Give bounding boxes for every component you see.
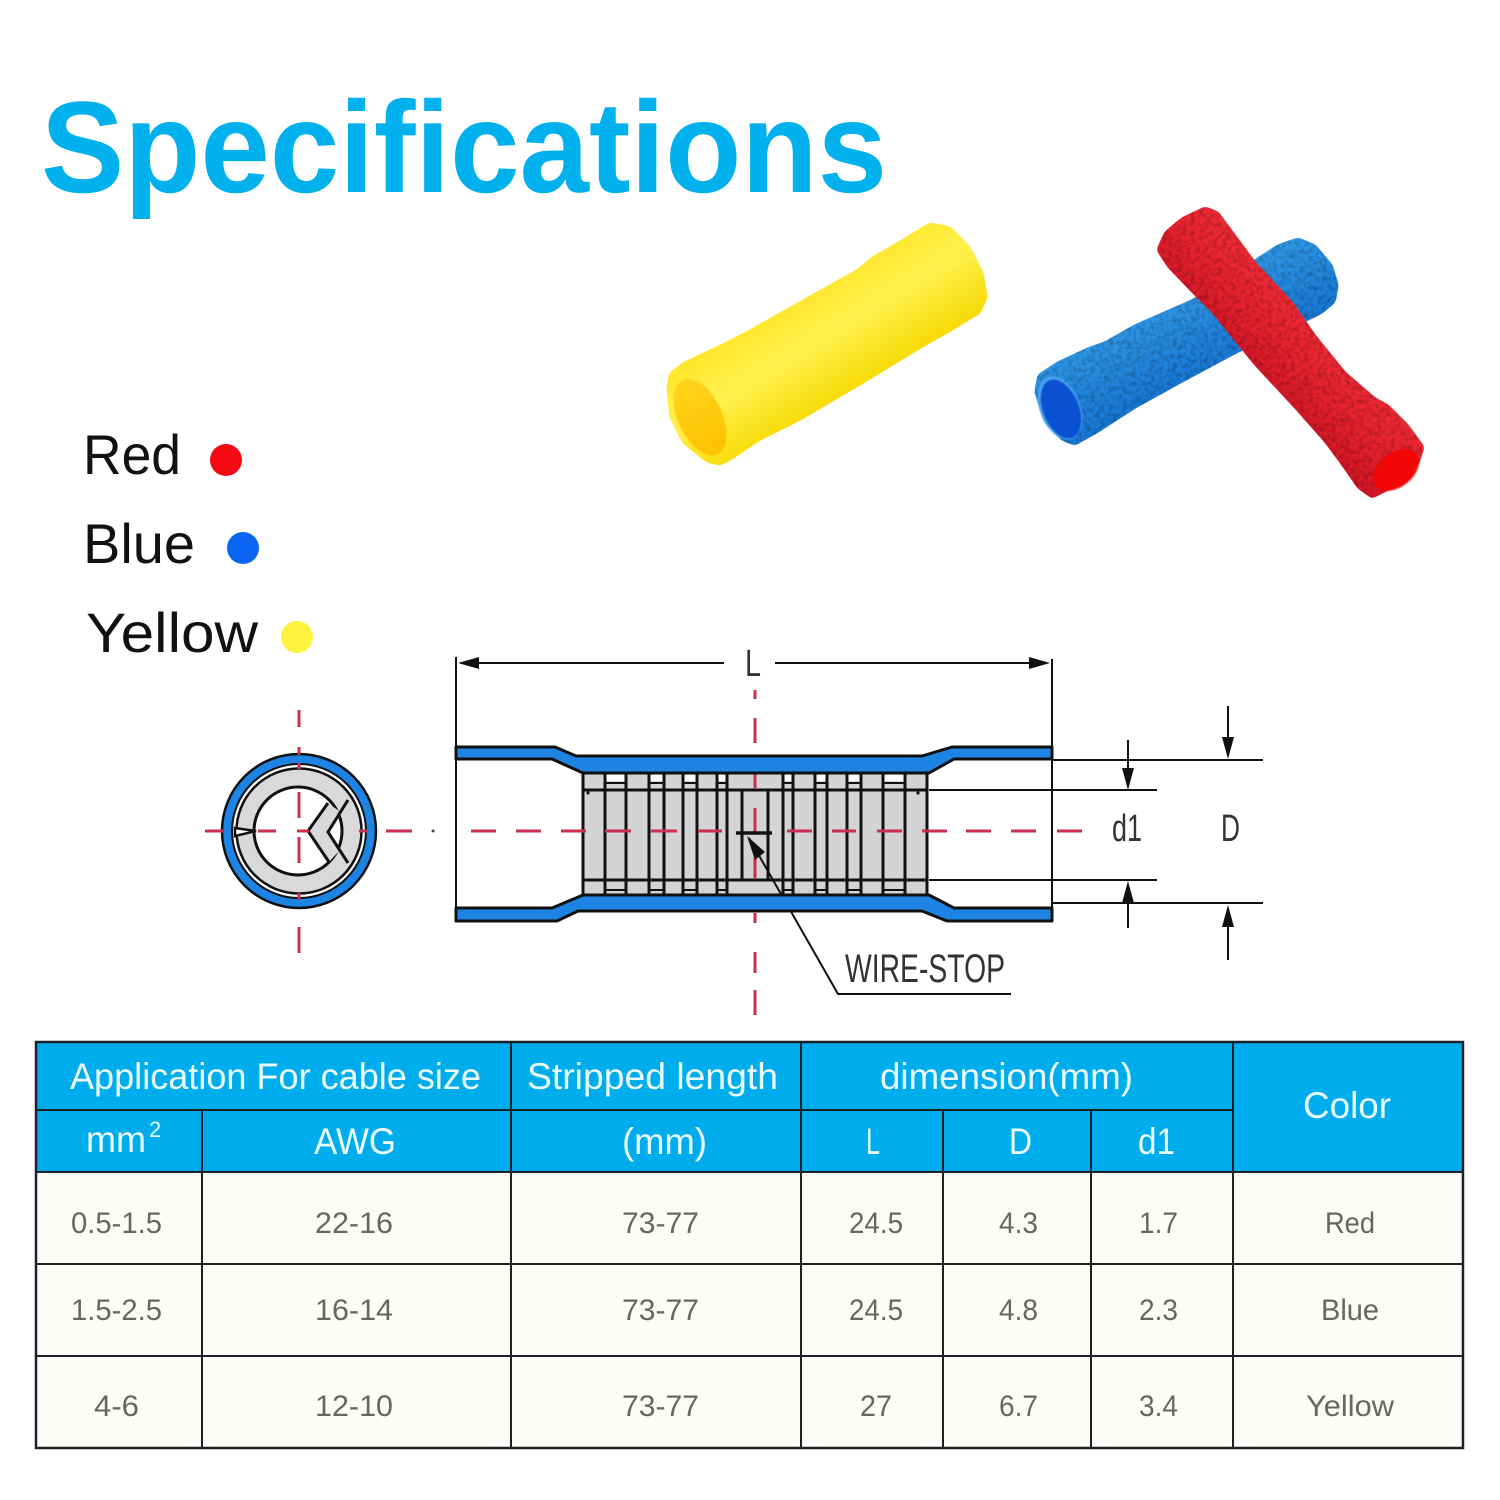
photo: yellow butt connector (663, 223, 987, 465)
table row: blue (71, 1294, 1379, 1327)
table row: red: 0.5-1.5 (71, 1207, 162, 1240)
table header labels: d1 (1138, 1121, 1175, 1162)
outer blue insulation top (456, 747, 1052, 773)
diagram: side section of connector (456, 690, 1082, 1015)
table row: blue: Blue (1321, 1294, 1379, 1327)
table row: yellow: 73-77 (622, 1390, 699, 1423)
table row: blue: 2.3 (1139, 1294, 1178, 1327)
table header labels: Application For cable size (70, 1056, 481, 1097)
table row: yellow: 12-10 (315, 1390, 393, 1423)
table header labels: Color (1303, 1085, 1391, 1126)
table row: yellow: 3.4 (1139, 1390, 1178, 1423)
specification table (36, 1042, 1463, 1448)
photo: red butt connector (1157, 207, 1427, 499)
table grid (36, 1042, 1463, 1448)
table header labels: dimension(mm) (880, 1056, 1133, 1097)
title: Specifications (41, 74, 887, 220)
legend item: red: Red (83, 423, 181, 486)
table row: red: 1.7 (1139, 1207, 1178, 1240)
table body background (36, 1172, 1463, 1448)
legend item: blue (83, 512, 259, 575)
legend: colour options (83, 423, 313, 664)
table row: red: 22-16 (315, 1207, 393, 1240)
table row: red: 24.5 (849, 1207, 903, 1240)
table row: blue: 24.5 (849, 1294, 903, 1327)
table header labels: mm (86, 1119, 146, 1160)
table header labels: Stripped length (527, 1056, 778, 1097)
table header labels: 2 (149, 1117, 161, 1142)
legend item: yellow: Yellow (86, 601, 259, 664)
dimension L (456, 643, 1052, 747)
table header labels (70, 1056, 1391, 1162)
table row: red: 4.3 (999, 1207, 1038, 1240)
table row: red (71, 1207, 1375, 1240)
table header labels: L (866, 1121, 880, 1162)
photo: blue butt connector (1029, 238, 1338, 446)
table row: red: Red (1325, 1207, 1375, 1240)
table row: blue: 16-14 (315, 1294, 393, 1327)
table row: red: 73-77 (622, 1207, 699, 1240)
dimension L: L (745, 643, 761, 685)
table header labels: D (1009, 1121, 1032, 1162)
table row: blue: 4.8 (999, 1294, 1038, 1327)
dimension d1 (929, 740, 1157, 928)
label: wire-stop: WIRE-STOP (845, 947, 1005, 991)
legend item: blue: Blue (83, 512, 195, 575)
dimension D (1052, 706, 1263, 960)
legend item: red (83, 423, 242, 486)
centre lines of side view (471, 690, 1082, 1015)
table row: blue: 1.5-2.5 (71, 1294, 162, 1327)
table header background (36, 1042, 1463, 1172)
table row: yellow (94, 1390, 1394, 1423)
table row: yellow: 27 (860, 1390, 892, 1423)
table header labels: AWG (314, 1121, 396, 1162)
table row: yellow: 6.7 (999, 1390, 1038, 1423)
table header labels: (mm) (622, 1121, 707, 1162)
dimension d1: d1 (1112, 808, 1142, 850)
leader line: wire-stop (747, 836, 1011, 994)
diagram: end view of connector (205, 710, 412, 953)
centre lines of end view (205, 710, 412, 953)
table row: yellow: Yellow (1306, 1390, 1394, 1423)
table row: blue: 73-77 (622, 1294, 699, 1327)
table row: yellow: 4-6 (94, 1390, 139, 1423)
outer blue insulation bottom (456, 895, 1052, 921)
dimension D: D (1221, 808, 1240, 850)
inner metal barrel (583, 773, 928, 895)
